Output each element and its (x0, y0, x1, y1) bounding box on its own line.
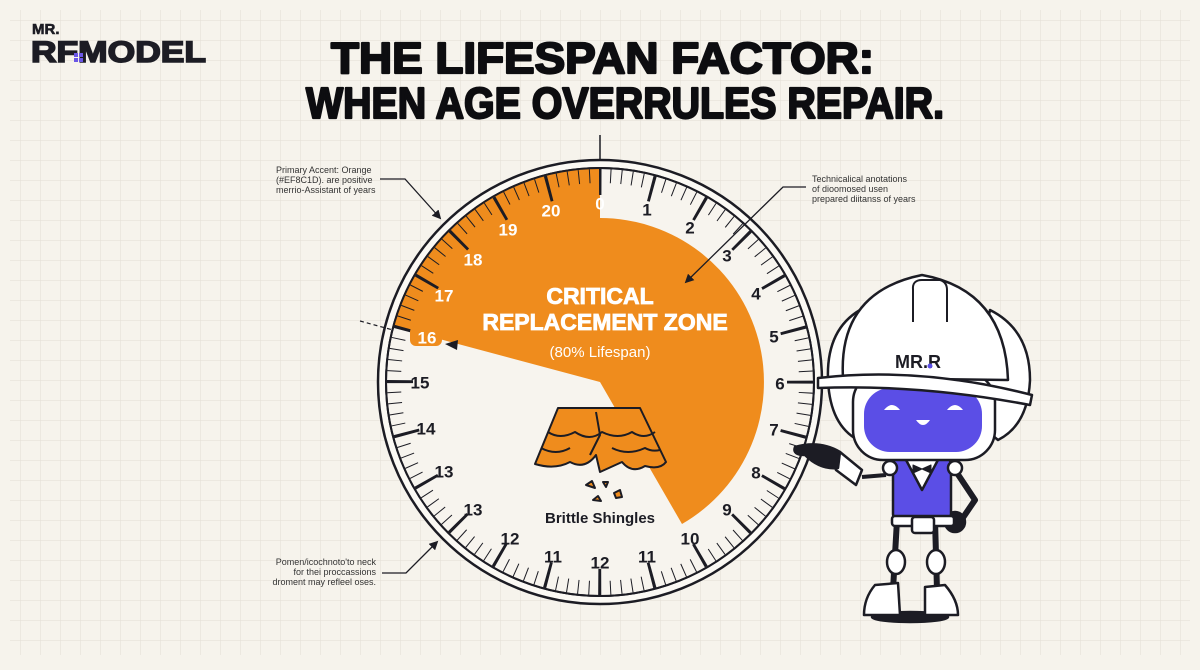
logo: MR. (32, 21, 60, 38)
zone label (482, 283, 728, 361)
gauge numbers: 15 (411, 374, 429, 392)
head (853, 372, 995, 460)
gauge numbers: 11 (544, 548, 562, 566)
annotation: top right (686, 174, 916, 282)
pointing arm (862, 475, 886, 477)
logo: RFMODEL (31, 36, 206, 69)
gauge numbers: 12 (501, 530, 519, 548)
robot mascot: MR.R (895, 352, 941, 372)
annotation: bottom left: droment may refleel oses. (272, 577, 376, 587)
gauge numbers: 17 (435, 286, 453, 306)
gauge numbers: 12 (591, 554, 609, 572)
16 tab (410, 326, 442, 346)
annotation: top right: of dioomosed usen (812, 184, 888, 194)
face (864, 388, 982, 452)
robot mascot (794, 275, 1032, 622)
zone label: REPLACEMENT ZONE (482, 309, 728, 335)
title (306, 34, 944, 128)
gauge numbers: 16 (418, 328, 436, 348)
title: THE LIFESPAN FACTOR: (331, 34, 874, 83)
gauge numbers: 8 (751, 464, 761, 482)
gauge numbers: 13 (464, 500, 482, 520)
title: WHEN AGE OVERRULES REPAIR. (306, 79, 944, 128)
gauge numbers: 3 (722, 246, 732, 266)
annotation: top right: prepared diitanss of years (812, 194, 916, 204)
gauge numbers: 9 (722, 500, 732, 520)
helmet (843, 275, 1008, 380)
logo (31, 21, 206, 69)
annotation: bottom left: for thei proccassions (293, 567, 376, 577)
gauge numbers: 4 (751, 284, 761, 304)
gauge numbers: 0 (595, 194, 605, 214)
legs (893, 520, 937, 590)
gauge numbers: 10 (681, 530, 699, 548)
body vest (893, 458, 951, 520)
icon: brittle shingles: Brittle Shingles (545, 510, 655, 527)
gauge numbers: 19 (499, 220, 517, 240)
zone label: CRITICAL (546, 283, 654, 309)
right arm on hip (955, 470, 975, 522)
gauge numbers: 11 (638, 548, 656, 566)
orange critical zone (393, 168, 764, 524)
gauge numbers: 13 (435, 462, 453, 482)
gauge numbers: 14 (417, 420, 436, 438)
gauge numbers: 6 (775, 374, 785, 394)
annotation: bottom left: Pomen/icochnoto'to neck (276, 557, 376, 567)
gauge numbers: 1 (642, 200, 652, 220)
arrow: to 16 (360, 321, 458, 350)
gauge numbers: 18 (464, 250, 482, 270)
annotation: top right: Technicalical anotations (812, 174, 908, 184)
gauge numbers: 20 (542, 202, 560, 220)
annotation: top left: Primary Accent: Orange (276, 165, 372, 175)
gauge numbers: 2 (685, 218, 695, 238)
gauge numbers (411, 194, 785, 572)
gauge numbers: 7 (769, 420, 779, 440)
gauge numbers: 5 (769, 328, 779, 346)
annotation: top left: merrio-Assistant of years (276, 185, 376, 195)
gauge (378, 135, 822, 604)
annotation: bottom left (272, 542, 437, 587)
annotation: top left: (#EF8C1D). are positive (276, 175, 373, 185)
ear shells (828, 310, 870, 440)
annotation: top left (276, 165, 440, 218)
icon: brittle shingles (535, 408, 666, 527)
zone label: (80% Lifespan) (550, 344, 650, 361)
